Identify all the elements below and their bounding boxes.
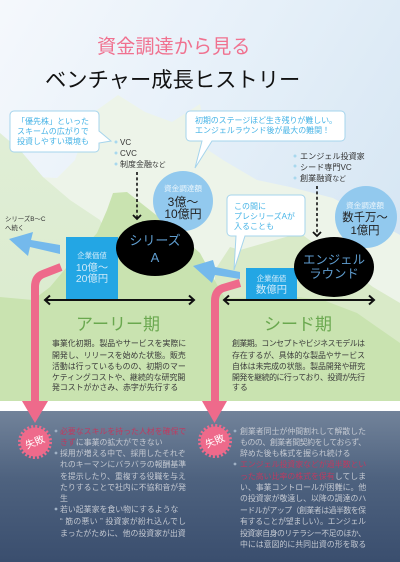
arrow: to series B and C xyxy=(9,232,60,256)
text: early stage failures: まったがために、他の投資家が出資 xyxy=(60,528,186,538)
text: seed stage description: 創業期。コンセプトやビジネスモデルは xyxy=(232,338,365,348)
title xyxy=(45,36,300,92)
callout: hardest stage: 初期のステージほど生き残りが難しい。 xyxy=(195,115,337,125)
ellipse: angel round: ラウンド xyxy=(309,267,359,281)
list: seed investors: エンジェル投資家 xyxy=(300,151,365,161)
box: series A valuation: 10億〜 xyxy=(76,261,108,274)
text: seed stage failures: 創業者同士が仲間割れして解散した xyxy=(240,426,366,436)
bubble: seed funding xyxy=(335,186,397,248)
text: seed stage failures: エンジェル投資家などが過半数とい xyxy=(240,459,366,469)
text: early stage description: 活動は行っているものの、初期のマー xyxy=(52,361,186,371)
heading: early stage: アーリー期 xyxy=(76,315,160,334)
text: early stage description: 事業化初期。製品やサービスを実際に xyxy=(52,338,186,348)
badge: early failure xyxy=(20,427,50,457)
ellipse: series A: A xyxy=(151,250,160,265)
box: seed valuation: 数億円 xyxy=(256,283,287,296)
box: seed valuation xyxy=(246,268,297,299)
text: early stage description: ケティングコストや、継続的な研究開 xyxy=(52,372,185,382)
text: early stage description: 開発し、リリースを始めた状態。販売 xyxy=(52,350,186,360)
white strip xyxy=(0,401,400,412)
note: continues to series B-C xyxy=(5,214,46,232)
background: front mountain xyxy=(0,192,400,402)
text: seed stage failures: い、事業コントロールが困難に。他 xyxy=(240,482,366,492)
arrow: seed stage span xyxy=(224,296,374,304)
text: seed stage description xyxy=(232,338,365,392)
text: early stage description xyxy=(52,338,186,392)
text: early stage failures: きずに事業の拡大ができない xyxy=(60,437,163,447)
callout: pre-series A: 入ることも xyxy=(234,222,274,231)
list: series A investors xyxy=(114,138,166,169)
text: seed stage failures xyxy=(234,426,366,549)
bubble: series A funding: 資金調達額 xyxy=(164,183,202,193)
text: seed stage failures: った高い比率の株式を保有してしま xyxy=(240,471,366,481)
list: series A investors: 制度金融など xyxy=(120,159,166,169)
callout: preferred stock: 投資しやすい環境も xyxy=(17,136,89,146)
text: seed stage description: する xyxy=(232,383,248,392)
list: seed investors: 創業融資など xyxy=(300,173,346,183)
background: far mountains xyxy=(0,95,400,402)
list: seed investors xyxy=(294,151,365,183)
callout: hardest stage xyxy=(186,111,345,168)
list: series A investors: VC xyxy=(120,138,131,147)
callout: pre-series A: この間に xyxy=(234,202,266,211)
text: early stage failures: 採用が増える中で、採用したそれぞ xyxy=(60,448,186,458)
arrow: dashed to series A xyxy=(133,172,141,219)
box: seed valuation: 企業価値 xyxy=(257,274,287,283)
callout: preferred stock xyxy=(10,111,111,152)
text: seed stage description: 存在するが、具体的な製品やサービス xyxy=(232,350,365,360)
callout: pre-series A xyxy=(227,195,305,270)
background: left middle mountain xyxy=(0,133,140,300)
arrow: early stage failure xyxy=(22,267,61,423)
text: seed stage description: 開発を継続的に行っており、投資が先行 xyxy=(232,372,365,382)
text: early stage failures: を提示したり、重複する役職を与え xyxy=(60,471,186,481)
heading: seed stage: シード期 xyxy=(264,315,332,334)
ellipse: series A xyxy=(116,220,194,276)
title: ベンチャー成長ヒストリー xyxy=(45,68,300,92)
title: 資金調達から見る xyxy=(97,36,250,58)
background: sky xyxy=(0,0,400,402)
arrow: seed to series A xyxy=(193,260,240,283)
text: seed stage failures: ものの、創業者間契約をしておらず、 xyxy=(240,437,366,447)
bubble: seed funding: 1億円 xyxy=(350,224,380,237)
bubble: series A funding xyxy=(153,171,213,231)
text: early stage failures: 生 xyxy=(60,493,68,503)
box: series A valuation xyxy=(66,237,118,299)
box: series A valuation: 20億円 xyxy=(76,272,108,285)
dark failure panel xyxy=(0,411,400,562)
text: early stage failures: たりすることで社内に不協和音が発 xyxy=(60,482,186,492)
arrow: seed stage failure xyxy=(202,283,240,423)
text: seed stage failures: の投資家が敬遠し、以降の調達のハ xyxy=(240,493,366,503)
note: continues to series B-C: シリーズB〜C xyxy=(5,214,46,223)
box: series A valuation: 企業価値 xyxy=(77,251,107,260)
note: continues to series B-C: へ続く xyxy=(5,223,24,232)
list: series A investors: CVC xyxy=(120,149,137,158)
callout: preferred stock: 「優先株」といった xyxy=(17,116,89,126)
badge: early failure: 失敗 xyxy=(23,432,47,452)
text: early stage failures: 必要なスキルを持った人材を確保で xyxy=(60,426,186,436)
callout: hardest stage: エンジェルラウンド後が最大の難関！ xyxy=(195,125,330,135)
background: right middle mountain xyxy=(215,233,400,402)
callout: preferred stock: スキームの広がりで xyxy=(17,126,89,136)
list: seed investors: シード専門VC xyxy=(300,162,352,172)
badge: seed failure: 失敗 xyxy=(203,431,227,451)
text: early stage failures: “ 筋の悪い ” 投資家が紛れ込んでし xyxy=(60,516,186,526)
bubble: seed funding: 数千万〜 xyxy=(342,211,388,224)
text: seed stage failures: 中には意図的に共同出資の形を取る xyxy=(240,539,366,549)
ellipse: angel round xyxy=(294,237,374,297)
bubble: series A funding: 10億円 xyxy=(164,207,202,221)
text: early stage failures xyxy=(55,426,186,538)
ellipse: series A: シリーズ xyxy=(129,233,181,248)
text: seed stage failures: ードルがアップ（創業者は過半数を保 xyxy=(240,505,366,515)
text: early stage description: 発コストがかさみ、赤字が先行する xyxy=(52,382,178,392)
text: early stage failures: れのキーマンにバラバラの報酬基準 xyxy=(60,459,186,469)
ellipse: angel round: エンジェル xyxy=(303,253,365,267)
text: seed stage failures: 辞めた後も株式を握られ続ける xyxy=(240,448,350,458)
text: early stage failures: 若い起業家を食い物にするような xyxy=(60,504,179,514)
bubble: seed funding: 資金調達額 xyxy=(346,200,384,210)
badge: seed failure xyxy=(200,426,230,456)
arrow: dashed to angel round xyxy=(313,186,321,236)
callout: pre-series A: プレシリーズAが xyxy=(234,211,295,221)
text: seed stage failures: 有することが望ましい）。エンジェル xyxy=(240,516,366,526)
bubble: series A funding: 3億〜 xyxy=(168,195,198,209)
text: seed stage description: 自体は未完成の状態。製品開発や研究 xyxy=(232,361,365,371)
arrow: early stage span xyxy=(45,296,194,304)
text: seed stage failures: 投資家自身のリテラシー不足のほか、 xyxy=(240,528,366,538)
